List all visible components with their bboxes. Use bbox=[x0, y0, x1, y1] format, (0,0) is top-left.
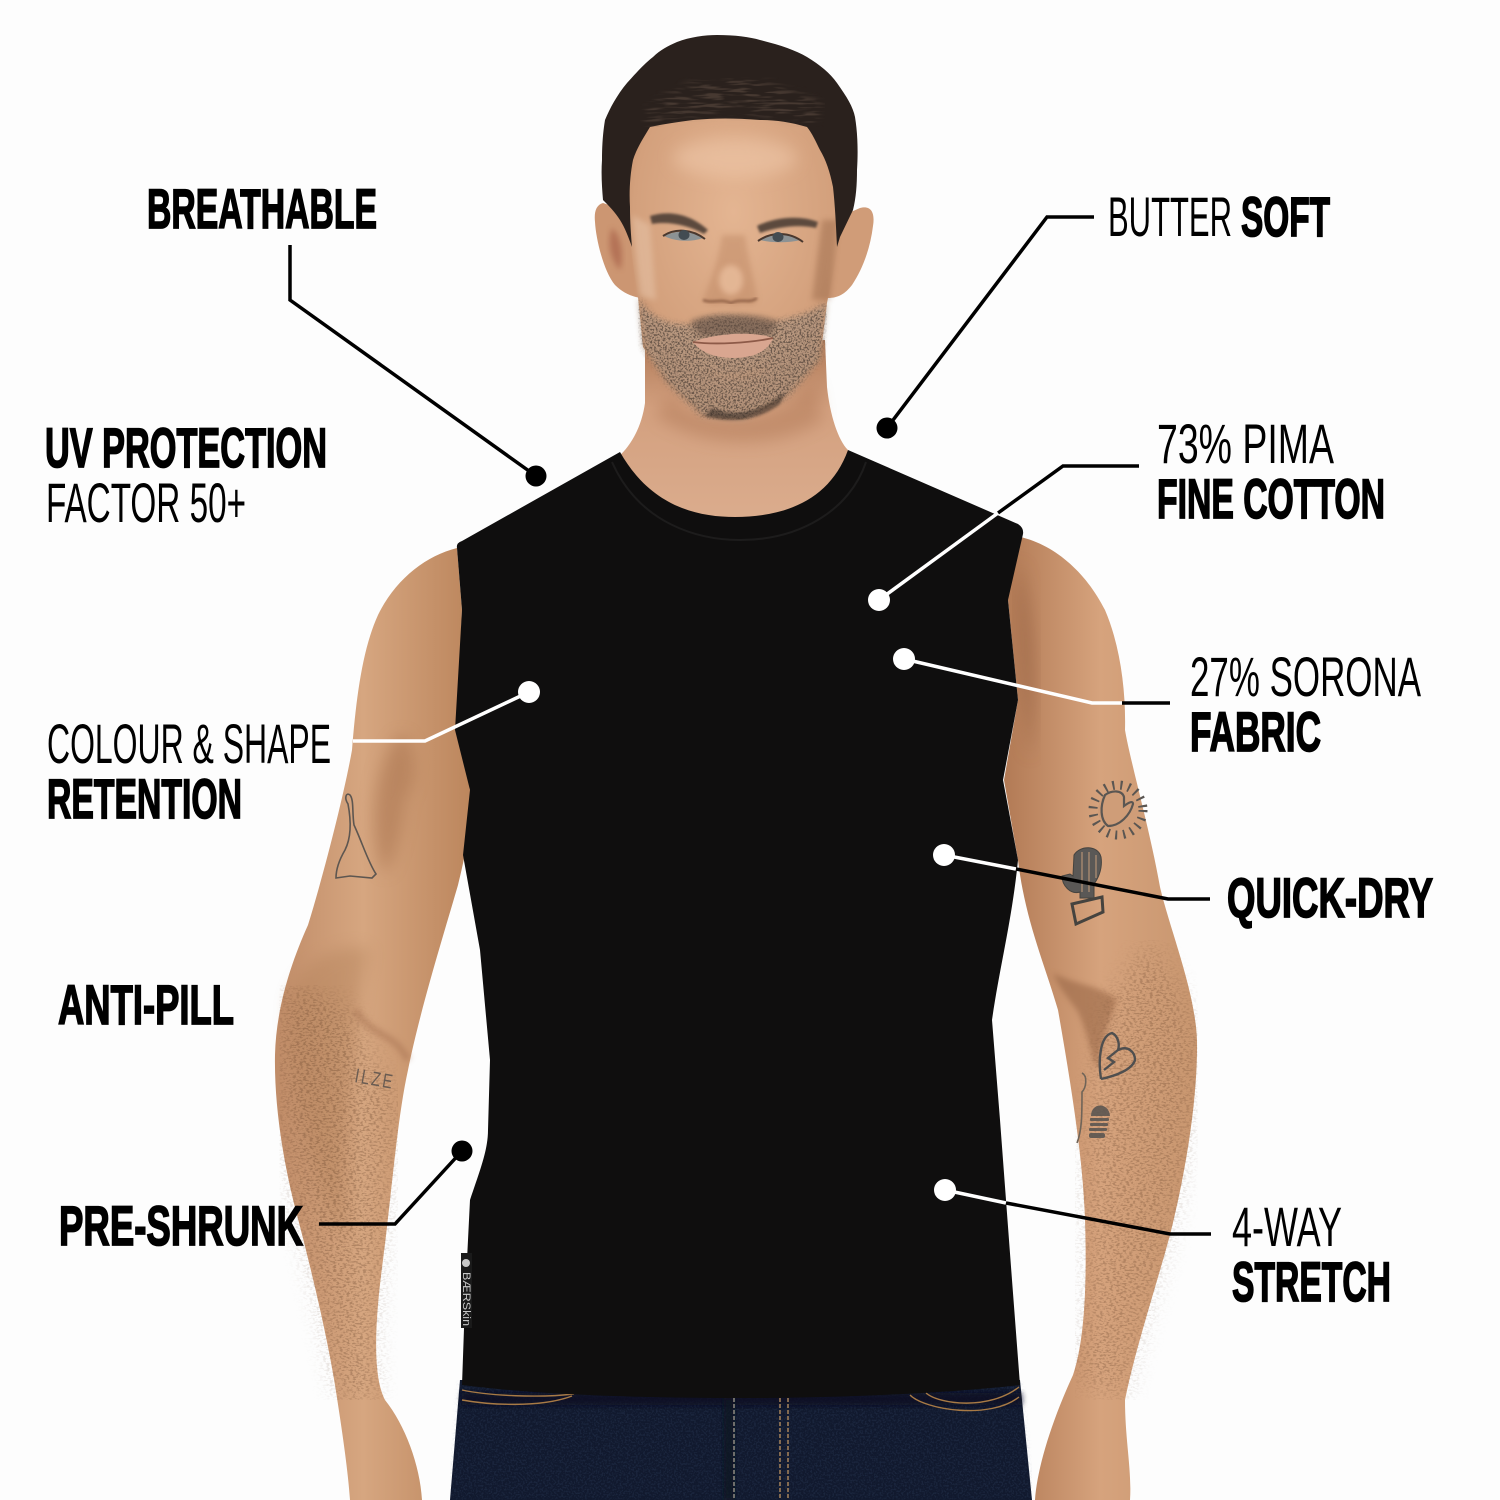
jeans bbox=[450, 1380, 1032, 1500]
black sleeveless shirt bbox=[455, 450, 1023, 1398]
shirt collar bbox=[612, 462, 866, 540]
face shading bbox=[673, 138, 797, 178]
callout: butter soft bbox=[876, 185, 1330, 438]
callout: sorona fabric bbox=[893, 645, 1421, 763]
callout: 4-way stretch: 4-WAY bbox=[1232, 1195, 1342, 1258]
ears bbox=[595, 203, 874, 298]
callout: uv protection bbox=[45, 416, 327, 534]
hair bbox=[602, 35, 858, 247]
callout: uv protection: UV PROTECTION bbox=[45, 416, 327, 479]
nose bbox=[703, 235, 757, 306]
callout: breathable: BREATHABLE bbox=[147, 177, 377, 240]
right arm bbox=[1004, 535, 1197, 1500]
mouth bbox=[693, 334, 773, 358]
tattoo: burger bbox=[1089, 1106, 1110, 1138]
callout: breathable bbox=[147, 177, 546, 486]
callout: 4-way stretch: STRETCH bbox=[1232, 1250, 1391, 1313]
face bbox=[627, 95, 840, 420]
callout: pima cotton bbox=[868, 412, 1385, 611]
callout: sorona fabric: FABRIC bbox=[1190, 700, 1321, 763]
tattoo: thin outline bbox=[1077, 1073, 1086, 1143]
brows and eyes bbox=[650, 213, 818, 242]
beard bbox=[638, 297, 827, 420]
neck bbox=[618, 340, 860, 535]
callout: uv protection: FACTOR 50+ bbox=[46, 471, 246, 534]
callout: butter soft: SOFT bbox=[1241, 185, 1330, 248]
callout: anti-pill: ANTI-PILL bbox=[58, 973, 234, 1036]
shirt tag bbox=[460, 1253, 472, 1328]
callout: colour and shape retention: COLOUR & SHAPE bbox=[47, 712, 331, 775]
callout: 4-way stretch bbox=[934, 1179, 1391, 1313]
tattoo: ILZE: ILZE bbox=[353, 1065, 396, 1094]
tattoo: broken heart bbox=[1100, 1033, 1135, 1079]
shirt tag: BÆRSkin bbox=[460, 1272, 472, 1326]
callout: pre-shrunk: PRE-SHRUNK bbox=[59, 1194, 303, 1257]
callout: pima cotton: 73% PIMA bbox=[1157, 412, 1334, 475]
callout: colour and shape retention: RETENTION bbox=[47, 767, 242, 830]
callout: butter soft: BUTTER bbox=[1108, 185, 1232, 248]
callout: pre-shrunk bbox=[59, 1140, 472, 1257]
left arm bbox=[275, 548, 470, 1500]
tattoo: boot in sun bbox=[1093, 785, 1143, 835]
callout: colour and shape retention bbox=[47, 681, 540, 830]
tattoo: dinosaur bbox=[336, 794, 376, 878]
figure: man wearing black sleeveless tee bbox=[275, 35, 1197, 1500]
callout: quick-dry bbox=[933, 844, 1433, 929]
tattoo: cactus bbox=[1062, 848, 1103, 924]
